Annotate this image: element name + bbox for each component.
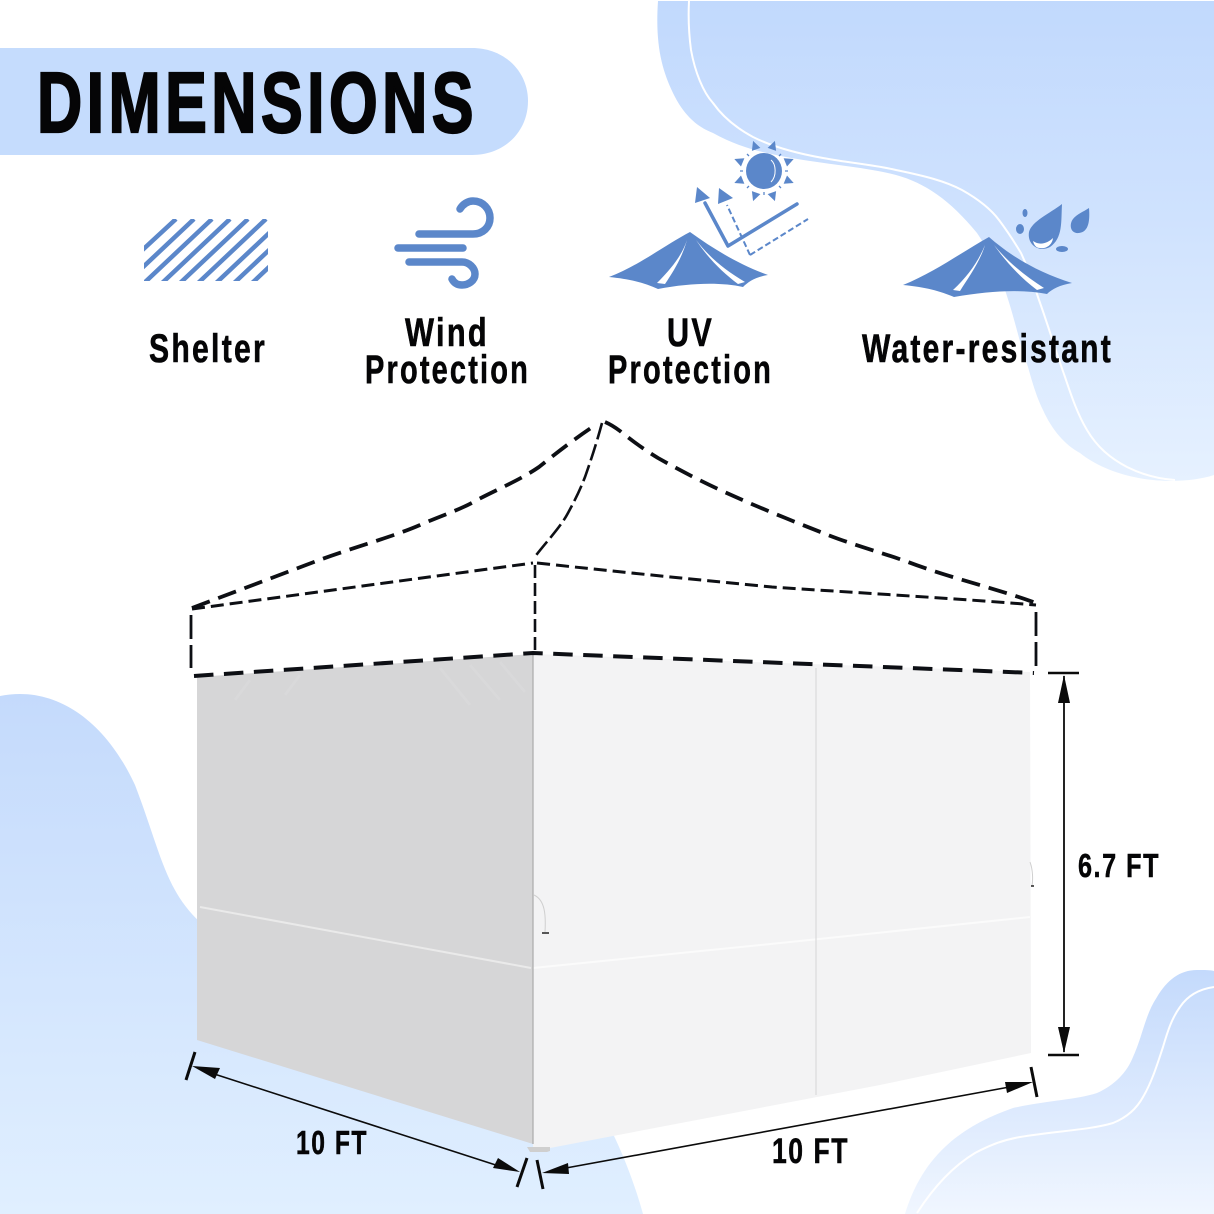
background blob: bottom right [905, 970, 1214, 1214]
label: Wind Protection: Protection [365, 348, 530, 392]
background blob: top right [657, 1, 1214, 481]
label: UV Protection: Protection [608, 348, 773, 392]
label: Wind Protection [365, 311, 530, 392]
label: UV Protection: UV [667, 311, 714, 355]
icon: shelter hatch [144, 219, 268, 281]
icon: wind [398, 201, 490, 285]
label: right 10 FT: 10 FT [772, 1132, 849, 1171]
panel: left wall [197, 654, 533, 1144]
panel: right wall [533, 654, 1031, 1148]
icon: UV protection [609, 139, 808, 289]
tent sidewalls [197, 654, 1034, 1152]
title banner [0, 48, 528, 155]
label: Water-resistant: Water-resistant [862, 327, 1113, 371]
label: 6.7 FT: 6.7 FT [1078, 847, 1160, 884]
dimension: height 6.7 FT [1048, 673, 1160, 1055]
title: DIMENSIONS [37, 56, 478, 151]
dimension: left width 10 FT [186, 1052, 527, 1187]
dimension: right width 10 FT [537, 1067, 1037, 1189]
icon: water-resistant [903, 204, 1089, 297]
canopy outline dashed [191, 422, 1036, 676]
background blob: bottom left [0, 694, 643, 1214]
label: Wind Protection: Wind [405, 311, 489, 355]
label: UV Protection [608, 311, 773, 392]
label: left 10 FT: 10 FT [296, 1124, 368, 1161]
label: Shelter: Shelter [149, 327, 267, 371]
